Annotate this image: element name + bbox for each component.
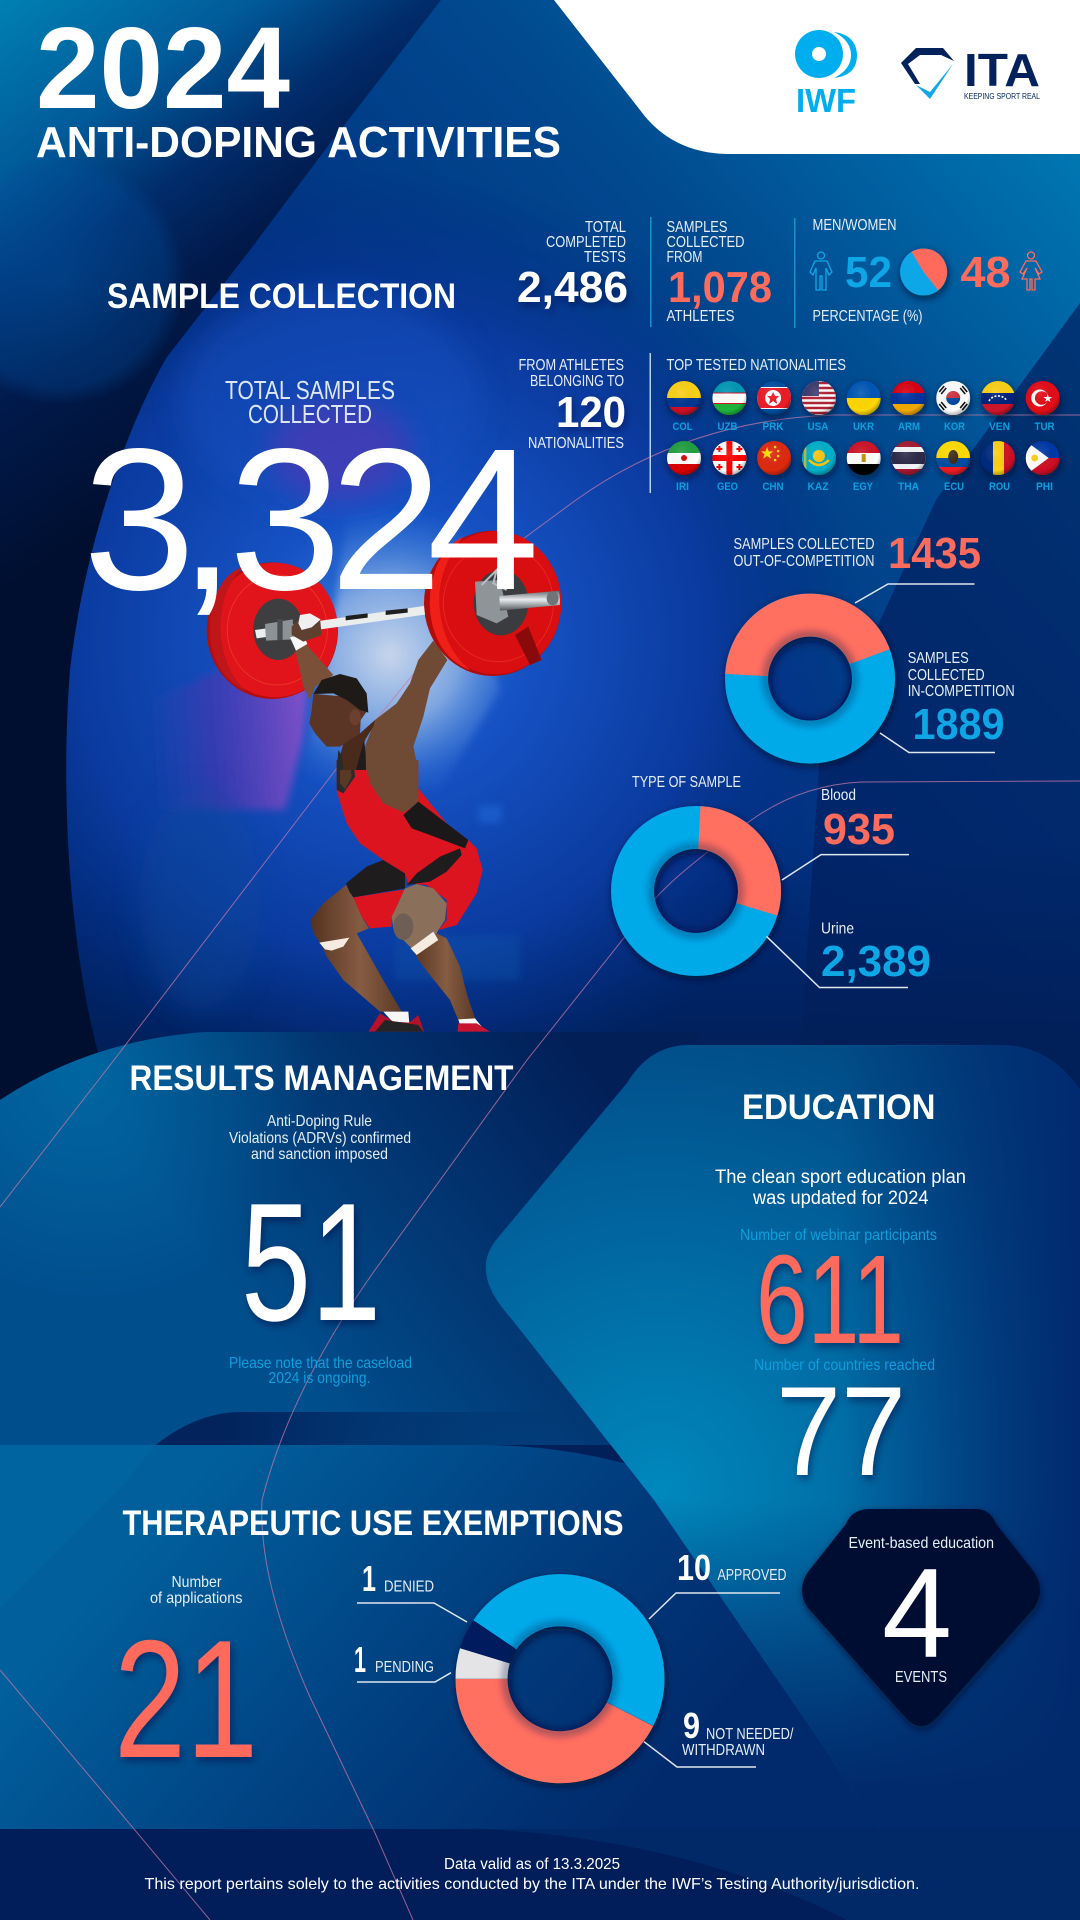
panel: event-based education: Event-based education [848,1535,994,1552]
stat: men and women percentage: 52 [845,248,892,297]
label: denied: 1 [362,1558,376,1599]
flag: CHN [757,441,791,475]
flag: USA [802,381,836,415]
stat: athletes: COLLECTED [666,234,744,251]
label: pending: PENDING [375,1659,434,1676]
stat: nationalities: 120 [556,388,626,437]
flag: ARM [891,381,925,415]
total samples collected: TOTAL SAMPLES [225,375,395,405]
flag labels: COL [672,421,693,433]
label: approved: APPROVED [718,1567,786,1584]
stat: number of applications: Number [172,1574,222,1591]
flag: VEN [981,381,1015,415]
flag: KAZ [802,441,836,475]
label: approved: 10 [677,1547,711,1588]
flag: THA [891,441,925,475]
flag: ECU [936,441,970,475]
stat: nationalities [518,357,626,452]
flag: KOR [936,381,970,415]
chart: men women pie [900,248,947,296]
total samples collected: 3,324 [83,406,539,632]
flag: ROU [981,441,1015,475]
chart: type of sample: TYPE OF SAMPLE [632,774,741,791]
panel: education: Number of webinar participants [740,1227,937,1244]
flag labels: IRI [676,481,689,493]
label: denied [362,1558,434,1599]
chart: type of sample [629,774,931,988]
stat: nationalities: BELONGING TO [530,373,624,390]
flag labels: ROU [989,481,1010,493]
stat: athletes [666,219,772,325]
flag labels: TUR [1034,421,1055,433]
panel: event-based education: EVENTS [895,1669,947,1686]
footer note: Data valid as of 13.3.2025 [444,1856,620,1873]
flag labels: CHN [762,481,784,493]
panel: education: The clean sport education plan [715,1167,966,1188]
panel: event-based education [802,1509,1040,1726]
flag labels: KOR [944,421,965,433]
label: blood: 935 [823,805,895,854]
flag: IRI [667,441,701,475]
panel: top tested nationalities [666,357,1060,493]
stat: number of applications [114,1574,258,1793]
stat: number of applications: of applications [150,1590,242,1607]
chart: TUE outcomes [451,1570,669,1788]
label: out of competition: SAMPLES COLLECTED [734,536,874,553]
logo: IWF: IWF [796,82,856,119]
athlete head and arms [290,613,447,770]
panel: education: 611 [756,1229,904,1370]
label: not needed or withdrawn: 9 [683,1705,700,1746]
stat: athletes: SAMPLES [666,219,728,236]
flag labels: USA [808,421,829,433]
panel: education: was updated for 2024 [752,1188,929,1209]
label: out of competition [734,529,981,578]
flag: EGY [847,441,881,475]
logo: ITA: KEEPING SPORT REAL [964,92,1040,101]
stat: total completed tests: COMPLETED [546,234,626,251]
stat: total completed tests [517,219,628,312]
barbell plates [207,531,561,699]
flag: PRK [757,381,791,415]
panel: results management: Please note that the caseload [229,1355,412,1372]
decorative pink lines [0,415,1080,1920]
stat: athletes: 1,078 [668,263,772,312]
panel: education: 77 [776,1360,906,1502]
flag: GEO [712,441,746,475]
panel: education: EDUCATION [742,1088,936,1127]
icon: woman [1020,252,1042,290]
label: out of competition: 1435 [888,529,981,578]
label: pending [354,1639,434,1680]
chart: in and out of competition [734,529,1015,752]
flag labels: PRK [762,421,784,433]
flag labels: ARM [898,421,920,433]
flag: TUR [1026,381,1060,415]
logo: ITA [901,44,1040,101]
label: not needed or withdrawn: NOT NEEDED/ [706,1726,794,1743]
flag labels: KAZ [808,481,829,493]
flag labels: UKR [853,421,874,433]
label: in competition: IN-COMPETITION [908,683,1015,700]
panel: results management: Anti-Doping Rule [267,1113,372,1130]
label: in competition: 1889 [912,700,1004,749]
athlete: weightlifter with barbell [207,531,561,1032]
label: approved [677,1547,786,1588]
title: ANTI-DOPING ACTIVITIES [36,118,561,167]
label: denied: DENIED [384,1578,434,1596]
panel: therapeutic use exemptions [114,1504,794,1793]
stat: men and women percentage: MEN/WOMEN [812,217,896,234]
panel: event-based education: 4 [882,1542,952,1684]
athlete legs and torso [311,760,490,1032]
flag labels [672,421,1055,493]
flag labels: VEN [989,421,1010,433]
stat: men and women percentage [810,217,1042,325]
label: in competition: SAMPLES [908,650,969,667]
panel: results management [130,1059,514,1387]
flag labels: EGY [853,481,874,493]
label: blood: Blood [821,787,856,804]
panel: education: Number of countries reached [754,1357,935,1374]
label: urine: Urine [821,920,854,938]
stat: nationalities: FROM ATHLETES [518,357,624,374]
flag labels: GEO [717,481,738,493]
panel: education [715,1088,966,1502]
footer note [144,1856,920,1893]
panel: results management: 2024 is ongoing. [268,1370,370,1387]
flag labels: PHI [1036,481,1053,493]
flag labels: ECU [944,481,964,493]
icon: man [810,252,832,290]
flag: PHI [1026,441,1060,475]
panel: results management: Violations (ADRVs) confirmed [229,1130,411,1147]
panel: top tested nationalities: TOP TESTED NATIONALITIES [666,357,846,374]
logo: IWF [795,30,857,119]
label: out of competition: OUT-OF-COMPETITION [734,553,874,570]
label: urine: 2,389 [821,937,931,986]
label: pending: 1 [354,1639,366,1680]
barbell [255,570,560,641]
panel: results management: 51 [241,1168,381,1356]
stat: athletes: FROM [666,249,702,266]
title: 2024 [36,3,290,133]
panel: results management: RESULTS MANAGEMENT [130,1059,514,1098]
label: in competition: COLLECTED [908,667,985,684]
stat: men and women percentage: 48 [960,248,1010,297]
stat: total completed tests: TOTAL [585,219,626,236]
flag: UKR [847,381,881,415]
stat: number of applications: 21 [114,1605,258,1793]
flag: UZB [712,381,746,415]
flag: COL [667,381,701,415]
stat: total completed tests: 2,486 [517,263,628,312]
logo: ITA: ITA [964,44,1040,96]
flag labels: THA [898,481,919,493]
stat: athletes: ATHLETES [666,308,734,325]
stat: men and women percentage: PERCENTAGE (%) [812,308,922,325]
label: not needed or withdrawn [682,1705,794,1759]
stat: nationalities: NATIONALITIES [528,435,624,452]
flag labels: UZB [718,421,738,433]
white logo panel [554,0,1080,154]
stat: total completed tests: TESTS [584,249,626,266]
label: not needed or withdrawn: WITHDRAWN [682,1742,765,1759]
total samples collected: COLLECTED [248,399,372,429]
footer note: This report pertains solely to the activities conducted by the ITA under the IWF’s Testing Authority/jurisdiction. [144,1876,920,1893]
title [36,3,561,167]
panel: therapeutic use exemptions: THERAPEUTIC USE EXEMPTIONS [122,1504,624,1543]
label: in competition [908,650,1015,749]
panel: results management: and sanction imposed [251,1146,388,1163]
heading: sample collection: SAMPLE COLLECTION [107,277,456,316]
